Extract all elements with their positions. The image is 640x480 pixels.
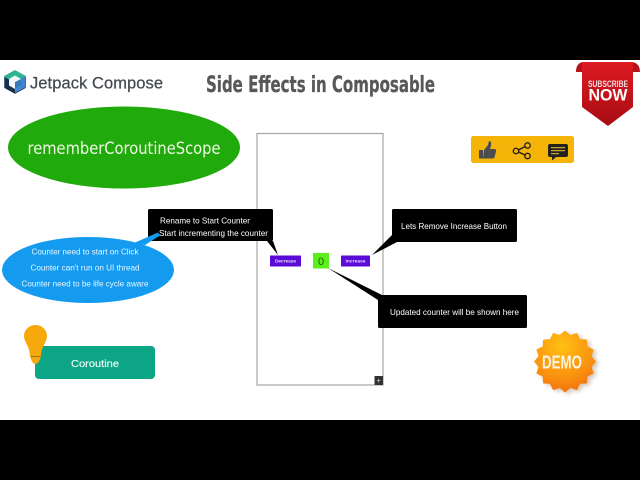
button: decrease	[270, 256, 301, 266]
counter value: 0	[318, 256, 324, 268]
icon: comment	[548, 144, 568, 160]
note line 2: Counter can't run on UI thread	[30, 264, 140, 272]
callout: rename to start counter	[148, 209, 278, 255]
button: increase	[341, 256, 370, 266]
button: plus action	[374, 376, 383, 385]
callout line 2: Start incrementing the counter	[159, 228, 268, 238]
panel: coroutine button: Coroutine	[71, 358, 119, 370]
panel: action icons	[471, 136, 574, 163]
white slide background	[0, 60, 640, 420]
ribbon label large: NOW	[588, 86, 628, 104]
button: plus action: +	[377, 378, 381, 385]
icon: compose hexagon	[5, 71, 25, 93]
panel: green ellipse	[8, 106, 240, 188]
note line 3: Counter need to be life cycle aware	[22, 280, 149, 288]
callout line 1: Rename to Start Counter	[160, 216, 250, 226]
subscribe ribbon	[576, 62, 640, 126]
panel: coroutine button	[35, 346, 155, 379]
callout: remove increase button	[372, 209, 517, 255]
badge: demo	[534, 330, 599, 394]
counter value	[313, 253, 329, 268]
logo text: Jetpack Compose	[30, 74, 163, 92]
icon: share	[513, 143, 530, 159]
ellipse heading: rememberCoroutineScope	[28, 139, 220, 159]
button: increase: Increase	[346, 258, 366, 264]
callout: updated counter	[328, 268, 527, 328]
panel: blue ellipse notes	[2, 232, 174, 303]
badge text: DEMO	[542, 352, 582, 372]
callout: remove increase button: Lets Remove Increase Button	[401, 221, 507, 231]
logo: Jetpack Compose	[5, 71, 163, 93]
panel: phone screen	[257, 134, 383, 385]
icon: light bulb	[24, 325, 47, 364]
icon: thumbs up	[479, 141, 496, 158]
note line 1: Counter need to start on Click	[32, 248, 139, 256]
callout: updated counter: Updated counter will be shown here	[390, 307, 519, 317]
title: Side Effects in Composable	[206, 73, 435, 98]
button: decrease: Decrease	[275, 258, 296, 264]
